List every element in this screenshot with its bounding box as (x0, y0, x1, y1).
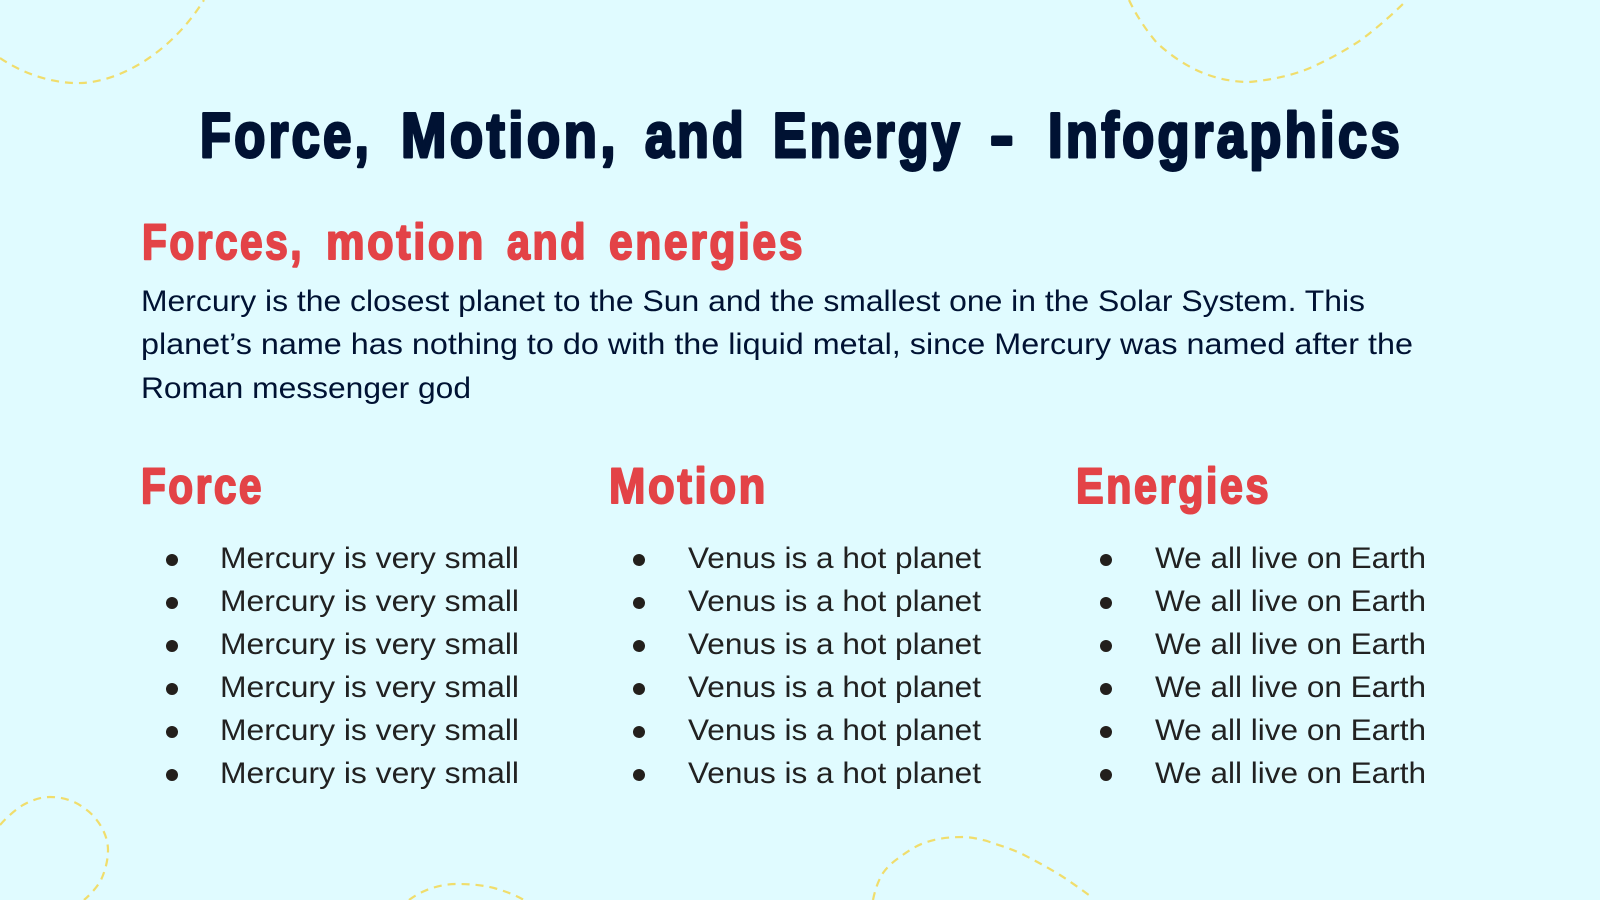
list: motion items: Venus is a hot planet (688, 628, 982, 661)
list: force items: Mercury is very small (220, 671, 519, 704)
text block: introduction: Roman messenger god (141, 372, 471, 405)
list: energies items: We all live on Earth (1155, 542, 1426, 575)
title: Infographics (1048, 101, 1403, 171)
heading: energies: Energies (1076, 458, 1271, 514)
title: Motion, (401, 101, 619, 171)
list: force items (166, 542, 519, 790)
heading: forces, motion and energies: motion (326, 214, 486, 270)
heading: forces, motion and energies: energies (609, 214, 805, 270)
list: energies items (1100, 542, 1426, 790)
list: motion items: Venus is a hot planet (688, 714, 982, 747)
list: energies items: We all live on Earth (1155, 714, 1426, 747)
list: force items: Mercury is very small (220, 714, 519, 747)
panel: motion (609, 458, 982, 790)
list: energies items: We all live on Earth (1155, 628, 1426, 661)
text block: introduction (141, 285, 1413, 405)
title: Energy (773, 101, 963, 171)
list: motion items: Venus is a hot planet (688, 542, 982, 575)
text block: introduction: Mercury is the closest planet to the Sun and the smallest one in the Solar System. This (141, 285, 1365, 318)
heading: motion: Motion (609, 458, 768, 514)
list: force items: Mercury is very small (220, 585, 519, 618)
title: - (990, 101, 1018, 171)
list: motion items: Venus is a hot planet (688, 585, 982, 618)
list: energies items: We all live on Earth (1155, 585, 1426, 618)
heading: forces, motion and energies: and (507, 214, 588, 270)
list: force items: Mercury is very small (220, 757, 519, 790)
panel: force (141, 458, 519, 790)
list: energies items: We all live on Earth (1155, 671, 1426, 704)
panel: energies (1076, 458, 1426, 790)
title: Force, (200, 101, 372, 171)
heading: force: Force (141, 458, 264, 514)
text block: introduction: planet’s name has nothing to do with the liquid metal, since Mercury was named after the (141, 328, 1413, 361)
list: motion items: Venus is a hot planet (688, 671, 982, 704)
list: energies items: We all live on Earth (1155, 757, 1426, 790)
list: force items: Mercury is very small (220, 628, 519, 661)
title: and (645, 101, 747, 171)
list: motion items (633, 542, 982, 790)
heading: forces, motion and energies: Forces, (142, 214, 304, 270)
list: motion items: Venus is a hot planet (688, 757, 982, 790)
list: force items: Mercury is very small (220, 542, 519, 575)
